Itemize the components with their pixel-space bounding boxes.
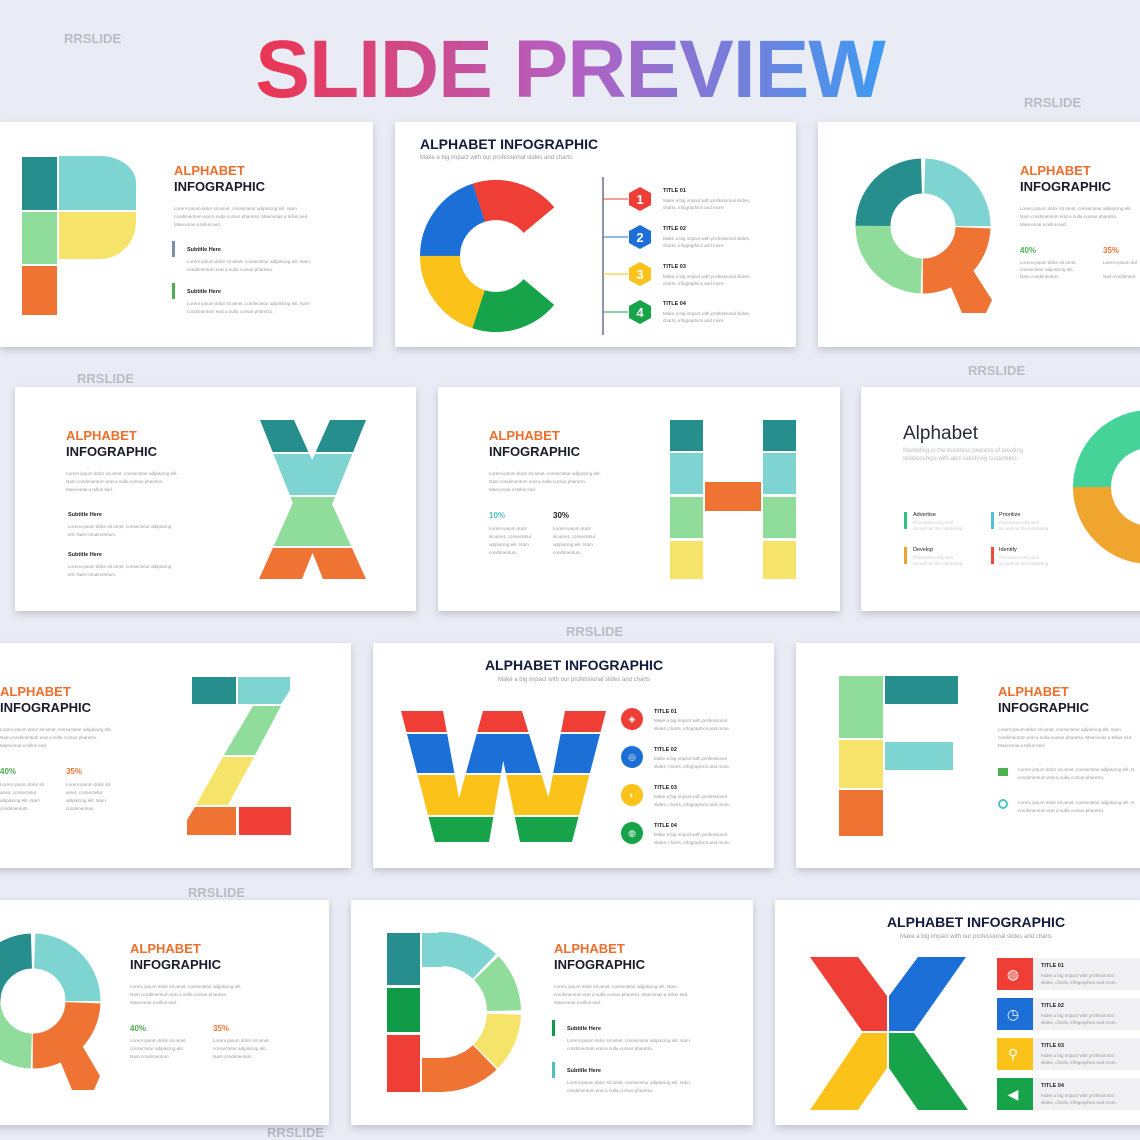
slide: letter X — [15, 387, 416, 611]
slide: letter O: Promotion only well — [913, 520, 953, 525]
slide: letter D: Maecenas a tellus sed. — [554, 1000, 601, 1005]
slide: letter H: 30% — [553, 511, 569, 520]
list items: Make a big impact with professional — [1041, 1053, 1114, 1058]
numbered list: Make a big impact with professional slides, — [663, 311, 750, 316]
letter H — [670, 420, 796, 579]
slide: letter Q: ALPHABET — [1020, 163, 1091, 178]
slide: letter X: elit. Nam condimentum. — [68, 572, 116, 577]
slide: letter W: ALPHABET INFOGRAPHIC — [485, 657, 663, 673]
watermarks: RRSLIDE — [968, 363, 1025, 378]
list items: Make a big impact with professional — [654, 794, 727, 799]
list items: TITLE 04 — [654, 823, 678, 829]
slide: letter X: elit. Nam condimentum. — [68, 532, 116, 537]
slide: letter Q — [818, 122, 1140, 347]
slide: letter C: Make a big impact with our professional slides and charts — [420, 155, 572, 161]
list items: TITLE 01 — [654, 709, 677, 715]
slide: letter X: Subtitle Here — [68, 552, 102, 558]
slide: letter Z: adipiscing elit. Nam — [0, 798, 40, 803]
slide: letter Q 2: Lorem ipsum dolor sit amet, — [213, 1038, 270, 1043]
slide: letter X: INFOGRAPHIC — [66, 444, 158, 459]
slide: letter Q: consectetur adipiscing elit. — [1020, 267, 1074, 272]
watermarks: RRSLIDE — [1024, 95, 1081, 110]
slide: letter Z: condimentum. — [0, 806, 29, 811]
text: Lorem ipsum dolor sit amet, consectetur adipiscing elit. Nam — [187, 301, 310, 306]
watermarks: RRSLIDE — [64, 31, 121, 46]
slide: letter D: Lorem ipsum dolor sit amet, consectetur adipiscing elit. Nam — [567, 1080, 690, 1085]
slide: letter Z: amet, consectetur — [66, 790, 103, 795]
letter X — [810, 957, 968, 1110]
slide: letter Q 2: Maecenas a tellus sed. — [130, 1000, 177, 1005]
numbered list: charts, infographics and more. — [663, 318, 725, 323]
title: SLIDE PREVIEW — [255, 24, 886, 115]
slide: letter Q 2: Lorem ipsum dolor sit amet, — [130, 1038, 187, 1043]
list items: ◐ — [629, 790, 635, 800]
slide: letter Q: Maecenas a tellus sed. — [1020, 222, 1067, 227]
numbered list: TITLE 02 — [663, 226, 686, 232]
slide: letter H: Nam condimentum erat a nulla cursus pharetra. — [489, 479, 586, 484]
slide: letter D — [351, 900, 753, 1125]
slide: letter C: ALPHABET INFOGRAPHIC — [420, 136, 598, 152]
slide: letter H: INFOGRAPHIC — [489, 444, 581, 459]
list items: slides, charts, infographics and more. — [1041, 980, 1117, 985]
slide: letter F: condimentum erat a nulla cursus pharetra. — [1018, 808, 1104, 813]
slide: letter H: Lorem ipsum dolor — [553, 526, 592, 531]
slide: letter X: Nam condimentum erat a nulla cursus pharetra. — [66, 479, 163, 484]
list items: slides, charts, infographics and more. — [654, 764, 730, 769]
slide: letter F: Lorem ipsum dolor sit amet, consectetur adipiscing elit. N — [1018, 767, 1134, 772]
slide: letter O: relationships with and satisfying customers. — [903, 456, 1019, 462]
letter Z — [187, 677, 291, 835]
slide: letter O: Promotion only well — [913, 555, 953, 560]
slide: letter Q: INFOGRAPHIC — [1020, 179, 1112, 194]
letter P — [22, 156, 136, 315]
slide: letter Q 2: consectetur adipiscing elit. — [213, 1046, 267, 1051]
slide: letter Q: Lorem ipsum dolor sit amet, consectetur adipiscing elit. — [1020, 206, 1132, 211]
slide: letter H: 10% — [489, 511, 505, 520]
letter Q — [871, 174, 992, 313]
numbered list: TITLE 01 — [663, 188, 686, 194]
list items: TITLE 02 — [1041, 1003, 1064, 1009]
list items: Make a big impact with professional — [654, 756, 727, 761]
slide: letter Q 2: consectetur adipiscing elit. — [130, 1046, 184, 1051]
slide: letter O: Develop — [913, 547, 933, 553]
numbered list: Make a big impact with professional slides, — [663, 236, 750, 241]
slide: letter F: INFOGRAPHIC — [998, 700, 1090, 715]
letter Q — [0, 949, 100, 1090]
slide: letter Q 2: Nam condimentum. — [130, 1054, 170, 1059]
slide: letter Z: adipiscing elit. Nam — [66, 798, 106, 803]
slide: letter O: Prioritize — [999, 512, 1020, 518]
slide: letter H: sit amet, consectetur — [489, 534, 532, 539]
watermarks: RRSLIDE — [267, 1125, 324, 1140]
numbered list: 1 — [636, 192, 644, 207]
slide: letter O: Advertise — [913, 512, 936, 518]
list items: slides, charts, infographics and more. — [1041, 1100, 1117, 1105]
slide: letter Q 2: Nam condimentum. — [213, 1054, 253, 1059]
slide: letter Z: 35% — [66, 767, 82, 776]
slide: letter F: Lorem ipsum dolor sit amet, consectetur adipiscing elit. N — [1018, 800, 1134, 805]
numbered list: TITLE 04 — [663, 301, 687, 307]
slide: letter O: Identify — [999, 547, 1017, 553]
list items — [621, 708, 730, 845]
slide: letter Q 2: Lorem ipsum dolor sit amet, consectetur adipiscing elit. — [130, 984, 242, 989]
slide: letter X: Maecenas a tellus sed. — [66, 487, 113, 492]
slide: letter Z: ALPHABET — [0, 684, 71, 699]
slide: letter F: Maecenas a tellus sed. — [998, 743, 1045, 748]
slide: letter Q: Lorem ipsum dolor sit amet, — [1020, 260, 1077, 265]
text: Lorem ipsum dolor sit amet, consectetur adipiscing elit. Nam — [187, 259, 310, 264]
slide: letter O: Marketing is the business process of creating — [903, 448, 1023, 454]
list items: Make a big impact with professional — [654, 832, 727, 837]
text: ALPHABET — [174, 163, 245, 178]
slide: letter O: as well as the marketing — [913, 526, 963, 531]
slide: letter Q: Nam condimentum erat a nulla cursus pharetra. — [1020, 214, 1117, 219]
letter W — [400, 711, 610, 843]
text: Subtitle Here — [187, 289, 221, 295]
slide: letter D: ALPHABET — [554, 941, 625, 956]
list items: ◍ — [1007, 966, 1019, 982]
list items: slides, charts, infographics and more. — [654, 802, 730, 807]
numbered list: 2 — [636, 230, 644, 245]
slide: letter X 2: ALPHABET INFOGRAPHIC — [887, 914, 1065, 930]
list items: slides, charts, infographics and more. — [1041, 1060, 1117, 1065]
list items: ◀ — [1008, 1086, 1019, 1102]
slide: letter O: Promotion only well — [999, 520, 1039, 525]
list items: ⚲ — [1008, 1046, 1018, 1062]
slide: letter F — [796, 643, 1140, 868]
watermarks: RRSLIDE — [77, 371, 134, 386]
watermarks: RRSLIDE — [188, 885, 245, 900]
list items: ◈ — [629, 714, 636, 724]
text: condimentum erat a nulla cursus pharetra. — [187, 309, 273, 314]
letter O — [1092, 429, 1140, 545]
slide: letter X: Lorem ipsum dolor sit amet, consectetur adipiscing elit. — [66, 471, 178, 476]
list items: Make a big impact with professional — [654, 718, 727, 723]
slide: letter C — [395, 122, 796, 347]
text: Lorem ipsum dolor sit amet, consectetur adipiscing elit. Nam — [174, 206, 297, 211]
slide: letter Q 2: Nam condimentum erat a nulla cursus pharetra. — [130, 992, 227, 997]
list items: TITLE 01 — [1041, 963, 1064, 969]
slide: letter H: Lorem ipsum dolor — [489, 526, 528, 531]
slide: letter H: ALPHABET — [489, 428, 560, 443]
slide: letter Q: Nam condiment — [1103, 274, 1136, 279]
slide: letter W: Make a big impact with our professional slides and charts — [498, 677, 650, 683]
list items: slides, charts, infographics and more. — [654, 726, 730, 731]
slide: letter O: Alphabet — [903, 423, 979, 444]
slide: letter X: Subtitle Here — [68, 512, 102, 518]
text: Maecenas a tellus sed. — [174, 222, 221, 227]
letter D — [352, 923, 530, 1101]
slide: letter O — [861, 387, 1140, 611]
slide: letter Z: amet, consectetur — [0, 790, 37, 795]
slide: letter Q: 40% — [1020, 246, 1036, 255]
slide: letter O: Promotion only well — [999, 555, 1039, 560]
numbered list: 4 — [636, 305, 644, 320]
slide: letter Z: INFOGRAPHIC — [0, 700, 92, 715]
numbered list: charts, infographics and more. — [663, 243, 725, 248]
slide: letter Q 2: INFOGRAPHIC — [130, 957, 222, 972]
list items: ◎ — [628, 752, 636, 762]
list items: slides, charts, infographics and more. — [654, 840, 730, 845]
slide: letter D: Subtitle Here — [567, 1026, 601, 1032]
slide: letter F: Lorem ipsum dolor sit amet, consectetur adipiscing elit. Nam — [998, 727, 1121, 732]
slide: letter X 2 — [775, 900, 1140, 1125]
slide: letter Q: Lorem ipsum dol — [1103, 260, 1137, 265]
slide: letter X: Lorem ipsum dolor sit amet, consectetur adipiscing — [68, 564, 172, 569]
slide: letter Z: Maecenas a tellus sed. — [0, 743, 47, 748]
list items: TITLE 04 — [1041, 1083, 1065, 1089]
watermarks: RRSLIDE — [566, 624, 623, 639]
slide: letter X: Lorem ipsum dolor sit amet, consectetur adipiscing — [68, 524, 172, 529]
list items: TITLE 03 — [654, 785, 677, 791]
slide: letter H: adipiscing elit. Nam — [553, 542, 593, 547]
text: condimentum erat a nulla cursus pharetra. Maecenas a tellus sed. — [174, 214, 308, 219]
list items: TITLE 02 — [654, 747, 677, 753]
slide: letter Z: Lorem ipsum dolor sit — [0, 782, 45, 787]
slide: letter Q 2: 40% — [130, 1024, 146, 1033]
slide: letter H — [438, 387, 840, 611]
slide: letter Z: 40% — [0, 767, 16, 776]
list items: slides, charts, infographics and more. — [1041, 1020, 1117, 1025]
slide: letter F: condimentum erat a nulla cursus pharetra. Maecenas a tellus sed. — [998, 735, 1132, 740]
numbered list — [603, 177, 750, 335]
slide: letter Z — [0, 643, 351, 868]
slide: letter O: as well as the marketing — [999, 526, 1049, 531]
slide: letter F: condimentum erat a nulla cursus pharetra. — [1018, 775, 1104, 780]
list items: ◍ — [628, 828, 636, 838]
slide: letter X 2: Make a big impact with our professional slides and charts — [900, 934, 1052, 940]
numbered list: Make a big impact with professional slides, — [663, 274, 750, 279]
slide: letter Q 2 — [0, 900, 329, 1125]
slide: letter F: ALPHABET — [998, 684, 1069, 699]
slide: letter D: condimentum erat a nulla cursus pharetra. — [567, 1088, 653, 1093]
numbered list: charts, infographics and more. — [663, 281, 725, 286]
list items: TITLE 03 — [1041, 1043, 1064, 1049]
slide: letter H: Maecenas a tellus sed. — [489, 487, 536, 492]
slide: letter H: condimentum. — [489, 550, 518, 555]
donut C — [417, 177, 575, 335]
slide: letter D: INFOGRAPHIC — [554, 957, 646, 972]
list items — [997, 958, 1140, 1110]
slide: letter D: condimentum erat a nulla cursus pharetra. — [567, 1046, 653, 1051]
slide: letter Z: Lorem ipsum dolor sit — [66, 782, 111, 787]
slide: letter Q 2: 35% — [213, 1024, 229, 1033]
slide: letter H: condimentum. — [553, 550, 582, 555]
slide: letter D: Subtitle Here — [567, 1068, 601, 1074]
slide: letter D: condimentum erat a nulla cursus pharetra. Maecenas a tellus sed. — [554, 992, 688, 997]
numbered list: Make a big impact with professional slides, — [663, 198, 750, 203]
letter X — [255, 420, 370, 580]
list items: Make a big impact with professional — [1041, 1093, 1114, 1098]
slide: letter H: sit amet, consectetur — [553, 534, 596, 539]
slide: letter Z: Nam condimentum erat a nulla cursus pharetra. — [0, 735, 97, 740]
list items: Make a big impact with professional — [1041, 1013, 1114, 1018]
text: Subtitle Here — [187, 247, 221, 253]
letter F — [839, 676, 958, 836]
numbered list: TITLE 03 — [663, 264, 686, 270]
numbered list: 3 — [636, 267, 644, 282]
text: INFOGRAPHIC — [174, 179, 266, 194]
slide: letter X: ALPHABET — [66, 428, 137, 443]
text: condimentum erat a nulla cursus pharetra. — [187, 267, 273, 272]
slide: letter W — [373, 643, 774, 868]
slide: letter D: Lorem ipsum dolor sit amet, consectetur adipiscing elit. Nam — [567, 1038, 690, 1043]
slide: letter H: adipiscing elit. Nam — [489, 542, 529, 547]
slide: letter P — [0, 122, 373, 347]
text — [172, 163, 310, 314]
numbered list: charts, infographics and more. — [663, 205, 725, 210]
list items: Make a big impact with professional — [1041, 973, 1114, 978]
slide: letter O: as well as the marketing — [999, 561, 1049, 566]
slide: letter Q: Nam condimentum. — [1020, 274, 1060, 279]
slide: letter Q: 35% — [1103, 246, 1119, 255]
slide: letter Q 2: ALPHABET — [130, 941, 201, 956]
slide: letter D: Lorem ipsum dolor sit amet, consectetur adipiscing elit. Nam — [554, 984, 677, 989]
slide: letter Z: condimentum. — [66, 806, 95, 811]
list items: ◷ — [1007, 1006, 1019, 1022]
slide: letter Z: Lorem ipsum dolor sit amet, consectetur adipiscing elit. — [0, 727, 112, 732]
slide: letter H: Lorem ipsum dolor sit amet, consectetur adipiscing elit. — [489, 471, 601, 476]
slide: letter O: as well as the marketing — [913, 561, 963, 566]
